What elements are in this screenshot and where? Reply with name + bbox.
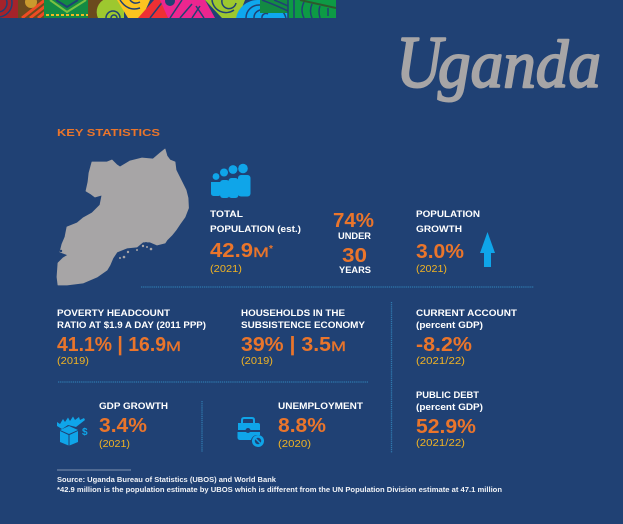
stat: 74% under 30 years [333,210,374,276]
stat: population growth: POPULATION [416,209,480,220]
stat: households in subsistence economy: 39% | 3.5 [241,334,331,356]
decorative banner [0,0,336,18]
stat: population growth [416,209,480,275]
title: U [396,22,446,104]
source and footnote: *42.9 million is the population estimate by UBOS which is different from the UN Population Division estimate at 47.1 million [57,487,502,494]
stat: poverty headcount [57,308,206,367]
source and footnote: Source: Uganda Bureau of Statistics (UBOS) and World Bank [57,477,276,484]
stat: total population: * [269,244,273,255]
stat: poverty headcount: M [166,338,181,354]
stat: total population: (2021) [210,263,242,275]
stat: current account: CURRENT ACCOUNT [416,308,517,319]
stat: GDP growth: 3.4% [99,415,147,437]
icon: population group [211,164,250,198]
stat: 74% under 30 years: 30 [342,245,367,267]
stat: 74% under 30 years: UNDER [338,231,371,242]
stat: current account [416,308,517,367]
stat: poverty headcount: RATIO AT $1.9 A DAY (2011 PPP) [57,320,206,331]
stat: current account: (2021/22) [416,355,465,367]
source and footnote [57,477,502,494]
map of Uganda [57,149,188,285]
icon: up arrow [480,232,495,267]
stat: current account: -8.2% [416,334,472,356]
stat: current account: (percent GDP) [416,320,483,331]
stat: total population: POPULATION (est.) [210,224,301,235]
stat: unemployment [278,401,363,450]
stat: total population: M [253,244,269,260]
icon: GDP growth box [57,416,88,446]
stat: public debt: PUBLIC DEBT [416,390,479,401]
stat: public debt: (percent GDP) [416,402,483,413]
stat: population growth: GROWTH [416,224,462,235]
heading: key statistics: KEY STATISTICS [57,127,160,139]
stat: households in subsistence economy: SUBSISTENCE ECONOMY [241,320,366,331]
stat: public debt: (2021/22) [416,437,465,449]
stat: households in subsistence economy [241,308,366,367]
stat: poverty headcount: POVERTY HEADCOUNT [57,308,170,319]
stat: total population [210,209,301,275]
stat: total population: TOTAL [210,209,243,220]
stat: total population: 42.9 [210,240,253,262]
stat: households in subsistence economy: HOUSEHOLDS IN THE [241,308,345,319]
icon: unemployment briefcase [238,418,264,447]
stat: public debt: 52.9% [416,416,476,438]
stat: population growth: 3.0% [416,241,464,263]
stat: poverty headcount: (2019) [57,355,89,367]
stat: households in subsistence economy: M [331,338,346,354]
stat: GDP growth: (2021) [99,438,130,450]
icon: GDP growth box: $ [82,427,88,438]
stat: unemployment: (2020) [278,438,311,450]
stat: GDP growth: GDP GROWTH [99,401,168,412]
stat: 74% under 30 years: YEARS [339,265,371,276]
stat: poverty headcount: 41.1% | 16.9 [57,334,166,356]
title: ganda [438,26,601,102]
stat: 74% under 30 years: 74% [333,210,374,232]
stat: households in subsistence economy: (2019) [241,355,273,367]
stat: unemployment: UNEMPLOYMENT [278,401,363,412]
stat: unemployment: 8.8% [278,415,326,437]
stat: GDP growth [99,401,168,450]
stat: public debt [416,390,483,449]
stat: population growth: (2021) [416,263,447,275]
